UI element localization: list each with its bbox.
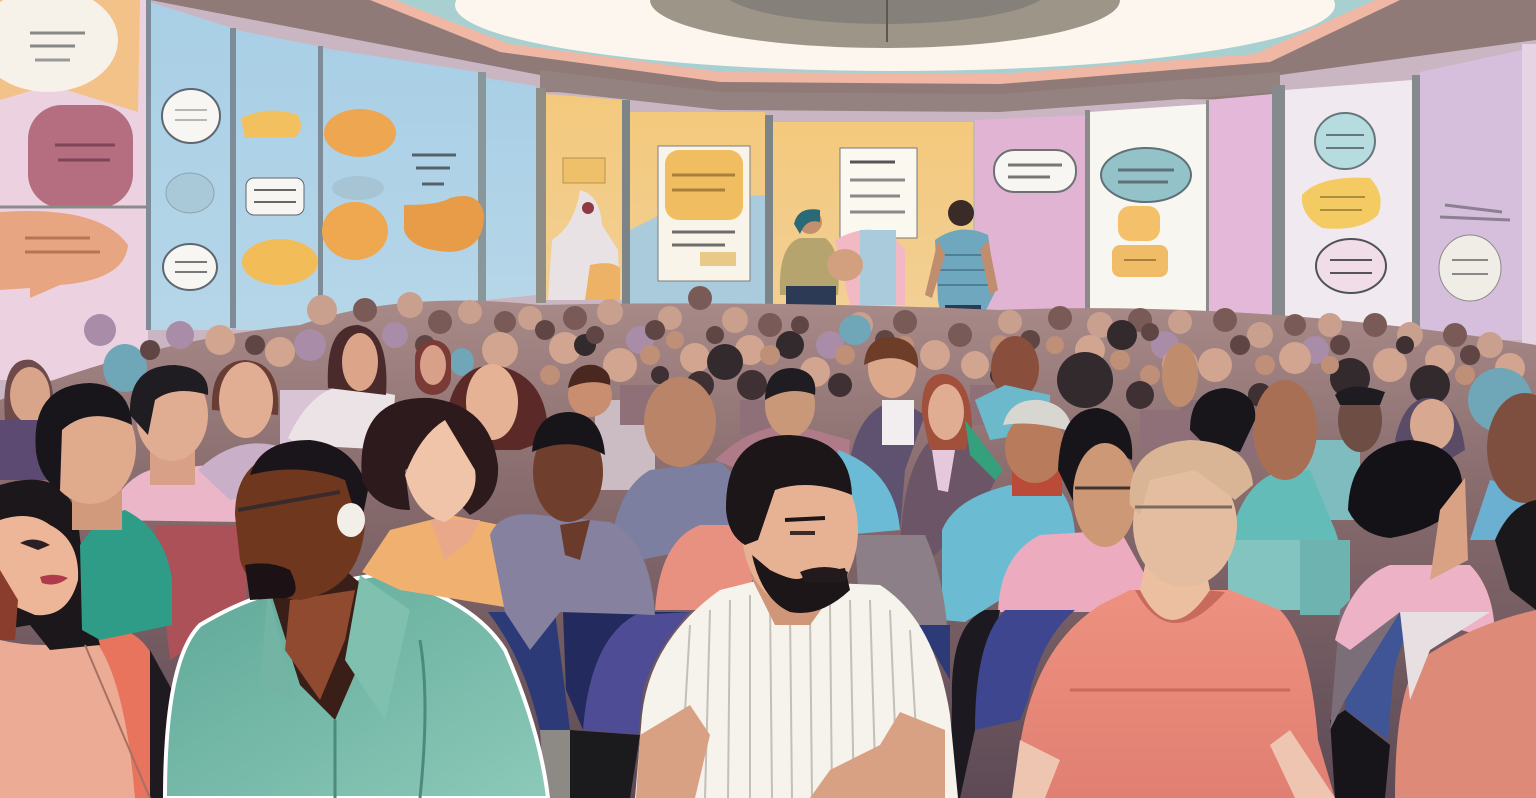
person: man far right with teal shirt bbox=[1228, 380, 1340, 545]
person: man with glasses in pink shirt bbox=[998, 408, 1145, 612]
presenter figures bbox=[780, 200, 998, 330]
person: woman bottom left bbox=[0, 480, 172, 798]
distant crowd heads bbox=[84, 286, 1532, 520]
person: man dark head right bbox=[1162, 343, 1255, 452]
left wall panel: pink with bubbles bbox=[0, 0, 148, 380]
person: man in pink shirt bbox=[105, 365, 243, 522]
person: woman with dark bob in orange top bbox=[361, 398, 535, 612]
person: woman in purple jacket bbox=[900, 374, 1003, 565]
person: man with glasses in green shirt bbox=[165, 440, 548, 798]
person: right edge coral shirt bbox=[1395, 500, 1536, 798]
person: man dark skin right of center bbox=[975, 336, 1050, 440]
person: woman with auburn hair bbox=[198, 360, 290, 500]
person: man in grey behind bbox=[568, 365, 612, 417]
person: woman in white top bbox=[288, 325, 395, 450]
person: bald man in slate shirt bbox=[610, 377, 750, 560]
ceiling bbox=[150, 0, 1536, 112]
person: bearded man in white striped shirt bbox=[635, 435, 958, 798]
seats row bbox=[155, 450, 1425, 798]
person: woman red hair bbox=[415, 340, 548, 450]
blue wall panels with speech bubbles bbox=[146, 0, 536, 330]
dense crowd layer bbox=[140, 316, 1480, 450]
person: dark-skinned man in grey shirt bbox=[490, 412, 655, 650]
mid audience members bbox=[0, 325, 1536, 622]
crowd background mass bbox=[0, 300, 1536, 798]
person: man with white cap in blue shirt bbox=[942, 400, 1075, 622]
person: far left woman bbox=[0, 360, 60, 480]
person: man in teal shirt behind left bbox=[35, 383, 172, 640]
person: woman with dark hair in pink top bbox=[1335, 440, 1495, 650]
person: man in center bbox=[715, 368, 850, 520]
person: far right dark-skinned man bbox=[1470, 393, 1536, 540]
right wall panels with speech bubbles bbox=[975, 44, 1536, 354]
person: man near right edge bbox=[1335, 387, 1465, 465]
center yellow panels bbox=[536, 88, 973, 307]
person: blonde woman in coral shirt bbox=[1012, 440, 1335, 798]
person: woman behind with brown hair bbox=[850, 337, 925, 530]
